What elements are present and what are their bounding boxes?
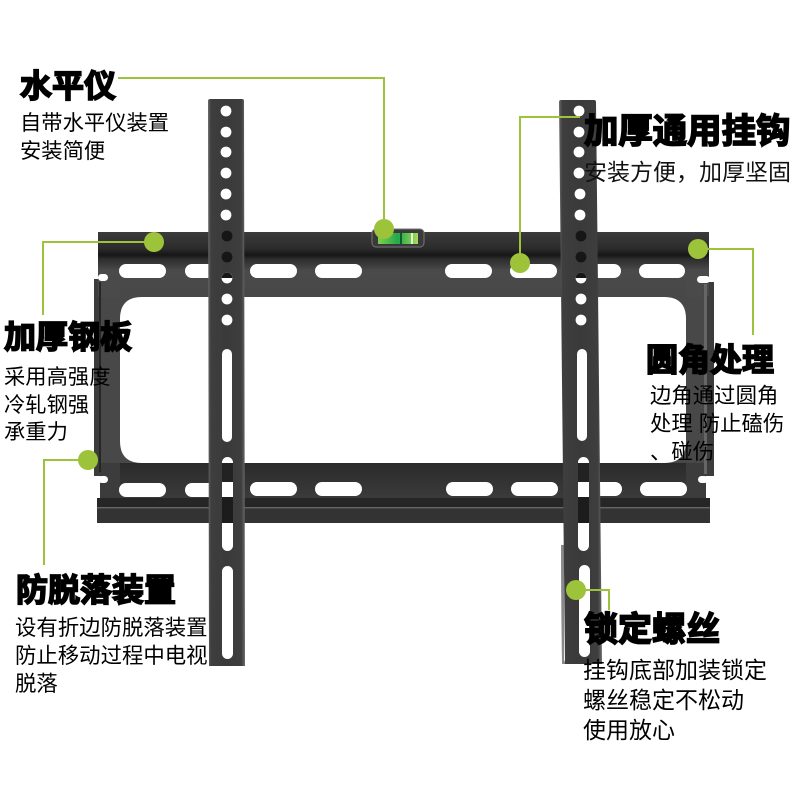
text: rounded corner	[646, 342, 784, 464]
text: level	[20, 68, 169, 163]
heading: thick hook: 加厚通用挂钩	[584, 113, 790, 151]
description: locking screw: 螺丝稳定不松动	[583, 687, 744, 713]
callout: rounded corner	[688, 239, 753, 335]
description: locking screw: 使用放心	[583, 717, 675, 743]
description: rounded corner: 边角通过圆角	[650, 384, 778, 408]
text: thick steel	[4, 319, 132, 444]
description: thick steel: 承重力	[4, 420, 68, 444]
description: level	[20, 111, 169, 163]
description: level: 安装简便	[20, 139, 105, 163]
side notches	[98, 274, 710, 483]
description: rounded corner: 、碰伤	[650, 440, 714, 464]
description: thick steel: 采用高强度	[4, 365, 110, 389]
heading: level: 水平仪	[20, 68, 116, 104]
callout: hook	[510, 117, 580, 273]
description: level: 自带水平仪装置	[20, 111, 169, 135]
description: thick steel	[4, 365, 110, 444]
description: locking screw	[583, 657, 767, 743]
description: anti-fall: 脱落	[15, 672, 58, 696]
text: anti-fall	[15, 572, 208, 696]
heading: locking screw: 锁定螺丝	[584, 611, 720, 649]
text: locking screw	[583, 611, 767, 743]
description: thick hook: 安装方便，加厚坚固	[584, 159, 791, 185]
callout: locking screw	[566, 580, 609, 610]
strap round holes	[221, 106, 232, 325]
description: anti-fall: 设有折边防脱落装置	[15, 616, 208, 640]
horizontal plate	[94, 232, 714, 523]
description: rounded corner	[650, 384, 784, 464]
strap long slots	[222, 349, 233, 659]
strap round holes	[574, 106, 586, 325]
right vertical strap	[559, 100, 602, 664]
description: rounded corner: 处理 防止磕伤	[650, 412, 784, 436]
callout: top left plate	[43, 232, 164, 315]
wall mount bracket	[94, 99, 714, 666]
heading: rounded corner: 圆角处理	[646, 342, 774, 378]
heading: anti-fall: 防脱落装置	[16, 572, 176, 608]
spirit level	[372, 229, 424, 247]
callout lines and dots	[43, 78, 753, 610]
description: anti-fall	[15, 616, 208, 696]
left vertical strap	[208, 99, 245, 666]
bottom row slots	[119, 482, 687, 497]
top row slots	[119, 264, 685, 278]
callout: level	[118, 78, 394, 239]
strap long slots	[577, 349, 590, 657]
heading: thick steel: 加厚钢板	[4, 319, 132, 355]
description: anti-fall: 防止移动过程中电视	[15, 644, 208, 668]
callout: anti-fall	[44, 450, 98, 565]
description: thick steel: 冷轧钢强	[4, 393, 89, 417]
text: thick hook	[584, 113, 791, 185]
central window	[120, 297, 686, 463]
description: locking screw: 挂钩底部加装锁定	[583, 657, 767, 683]
